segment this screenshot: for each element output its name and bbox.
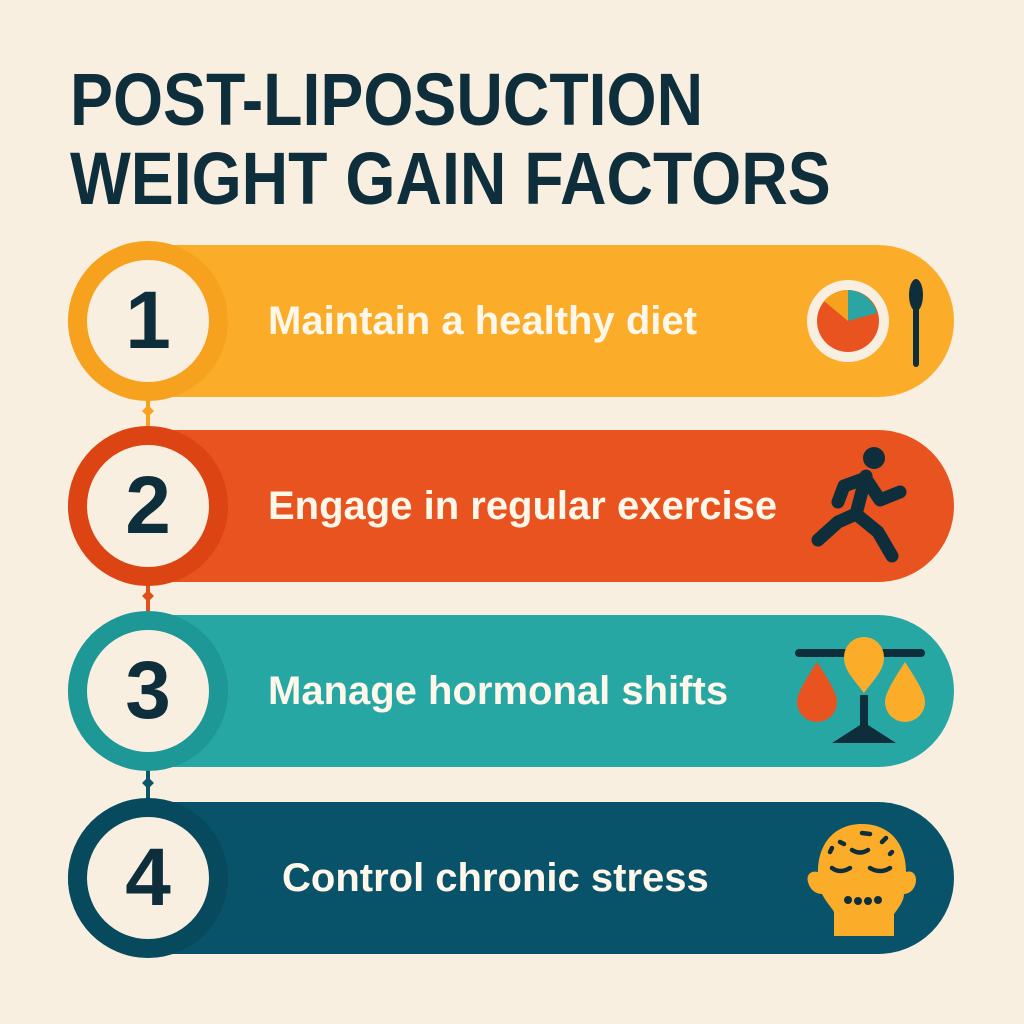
panel: step 2 xyxy=(68,430,954,582)
number circle 3 xyxy=(68,611,228,771)
label 2: Engage in regular exercise xyxy=(268,484,777,528)
connector 1-2 xyxy=(142,400,154,426)
label 3: Manage hormonal shifts xyxy=(268,669,728,713)
connector 3-4 xyxy=(142,770,154,798)
number circle 1: 1 xyxy=(125,275,171,366)
label 4: Control chronic stress xyxy=(282,856,709,900)
icon: runner xyxy=(812,447,906,562)
number circle 2 xyxy=(68,426,228,586)
panel: step 3 xyxy=(68,615,954,767)
title: WEIGHT GAIN FACTORS xyxy=(70,137,831,220)
icon: calm head xyxy=(808,824,916,936)
icon: hormone balance xyxy=(795,637,925,743)
title xyxy=(70,58,831,220)
number circle 3: 3 xyxy=(125,645,171,736)
title: POST-LIPOSUCTION xyxy=(70,58,703,141)
icon: plate and spoon xyxy=(807,279,923,367)
panel: step 1 xyxy=(68,245,954,397)
label 1: Maintain a healthy diet xyxy=(268,299,697,343)
panel: step 4 xyxy=(68,802,954,954)
number circle 4: 4 xyxy=(125,832,171,923)
number circle 1 xyxy=(68,241,228,401)
connector 2-3 xyxy=(142,586,154,612)
number circle 4 xyxy=(68,798,228,958)
number circle 2: 2 xyxy=(125,460,171,551)
